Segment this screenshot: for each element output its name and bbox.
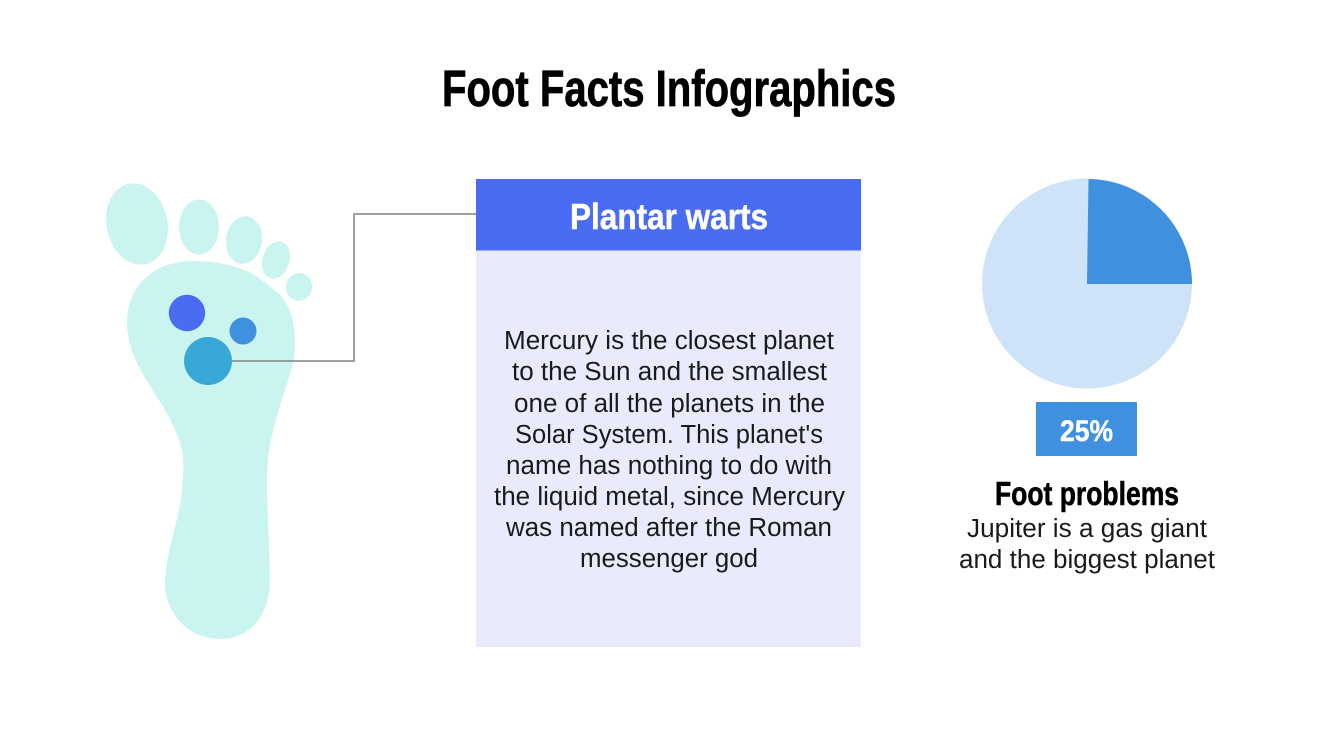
pie slice 25%	[1087, 179, 1192, 284]
title: Foot Facts Infographics	[442, 60, 896, 117]
connector line	[232, 214, 476, 361]
panel body text: was named after the Roman	[505, 514, 832, 542]
toes	[99, 178, 315, 304]
text: foot problems description: Jupiter is a gas giant	[967, 515, 1207, 543]
heading: foot problems: Foot problems	[995, 475, 1179, 512]
text: foot problems description	[959, 515, 1215, 574]
spot: plantar wart	[184, 337, 232, 385]
panel body text: one of all the planets in the	[514, 390, 825, 418]
spot: mid blue	[230, 318, 256, 344]
percentage badge	[1036, 402, 1137, 456]
foot sole	[127, 261, 295, 639]
panel background	[476, 179, 861, 647]
panel body text: messenger god	[580, 545, 758, 573]
pie remainder	[982, 178, 1192, 388]
panel body text: name has nothing to do with	[506, 452, 832, 480]
panel body text: the liquid metal, since Mercury	[494, 483, 845, 511]
panel body text: to the Sun and the smallest	[512, 358, 827, 386]
panel body text: Mercury is the closest planet	[504, 327, 834, 355]
panel body text	[494, 327, 845, 573]
percentage badge: 25%	[1060, 415, 1113, 448]
text: foot problems description: and the biggest planet	[959, 546, 1215, 574]
spot: dark blue	[169, 295, 205, 331]
pie chart: 25%	[982, 178, 1192, 388]
panel: plantar warts	[476, 179, 861, 647]
panel header	[476, 179, 861, 250]
panel heading: Plantar warts	[570, 196, 768, 237]
panel body text: Solar System. This planet's	[515, 421, 823, 449]
icon: foot with marked spots	[99, 178, 315, 639]
